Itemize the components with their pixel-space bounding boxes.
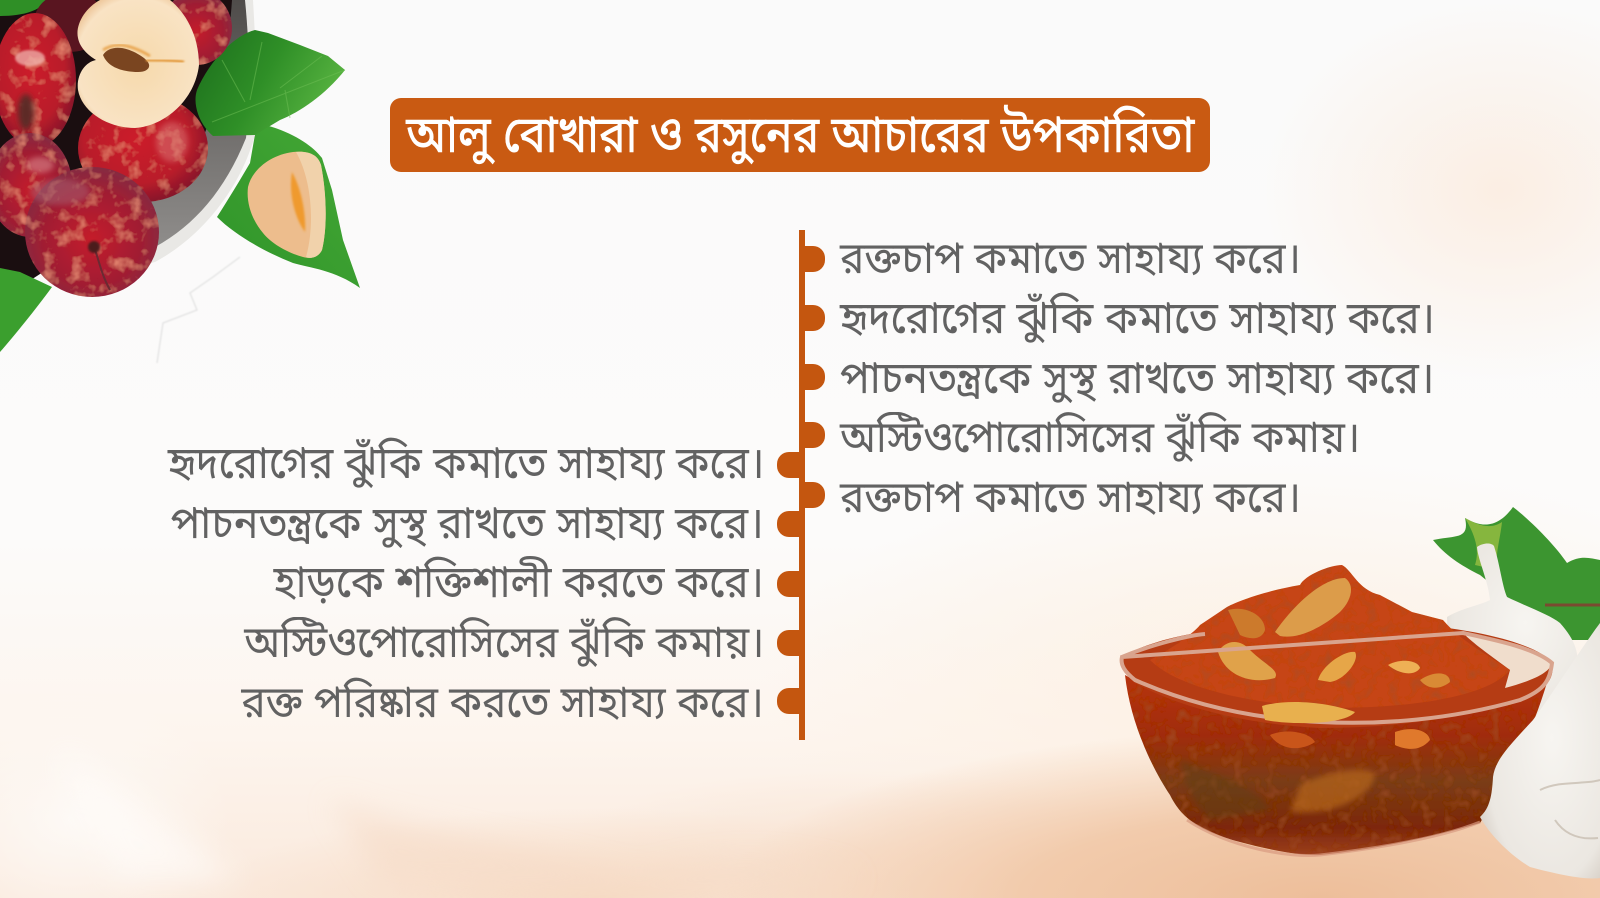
right benefits list: অস্টিওপোরোসিসের ঝুঁকি কমায়।	[840, 413, 1360, 462]
pickle mound	[1150, 565, 1510, 708]
bowl interior	[0, 0, 249, 247]
leaf: lower right	[217, 123, 360, 288]
curry leaves	[1433, 507, 1600, 640]
right benefits list: হৃদরোগের ঝুঁকি কমাতে সাহায্য করে।	[840, 294, 1435, 343]
left benefits list: রক্ত পরিষ্কার করতে সাহায্য করে।	[242, 678, 764, 727]
plum slice	[248, 152, 326, 258]
garlic: back	[1447, 544, 1578, 720]
left benefits list: হাড়কে শক্তিশালী করতে করে।	[274, 558, 764, 607]
leaf: top left	[0, 0, 48, 16]
plum: top right	[162, 0, 232, 65]
illustration: bowl of plums with leaves	[0, 0, 360, 352]
left benefits list: অস্টিওপোরোসিসের ঝুঁকি কমায়।	[244, 618, 764, 667]
plum: centre	[78, 94, 208, 202]
cloves in syrup	[1290, 770, 1375, 812]
plum: front	[25, 167, 159, 297]
bullet markers	[777, 246, 825, 714]
bowl	[0, 0, 256, 280]
garlic cloves in pickle	[1275, 578, 1351, 637]
leaf: upper right	[195, 30, 345, 136]
left benefits list: পাচনতন্ত্রকে সুস্থ রাখতে সাহায্য করে।	[171, 497, 764, 548]
illustration: garlic pickle in glass bowl	[1122, 507, 1600, 878]
left benefits list: হৃদরোগের ঝুঁকি কমাতে সাহায্য করে।	[167, 438, 764, 488]
glass rim	[1122, 633, 1552, 723]
plum: left	[0, 13, 76, 147]
plum: halved	[77, 0, 199, 128]
clove against the glass	[1262, 702, 1355, 723]
plum: lower left	[0, 133, 72, 237]
rim fill	[1122, 625, 1553, 728]
left benefits list	[167, 438, 764, 727]
timeline spine	[799, 230, 805, 740]
plum: back top	[34, 0, 106, 52]
glass back right	[1463, 633, 1552, 688]
right benefits list: রক্তচাপ কমাতে সাহায্য করে।	[840, 234, 1301, 283]
leaf: bottom left	[0, 268, 52, 352]
right benefits list: রক্তচাপ কমাতে সাহায্য করে।	[840, 473, 1301, 522]
right benefits list	[840, 234, 1435, 522]
bowl body	[1125, 672, 1550, 855]
shadow among plums	[0, 0, 232, 300]
title banner: আলু বোখারা ও রসুনের আচারের উপকারিতা	[406, 106, 1194, 163]
right benefits list: পাচনতন্ত্রকে সুস্থ রাখতে সাহায্য করে।	[840, 352, 1435, 403]
garlic: front	[1480, 623, 1600, 878]
